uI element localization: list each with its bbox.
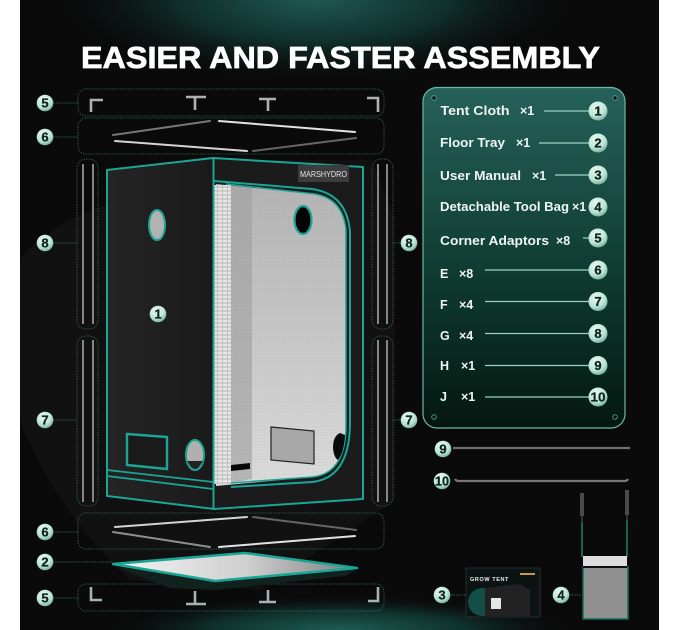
part 5 corner adaptors bottom (91, 587, 378, 604)
list labels: F (440, 298, 448, 312)
list labels: ×8 (556, 234, 570, 248)
mesh grid texture (216, 184, 346, 486)
list labels: Corner Adaptors (440, 234, 549, 248)
list number badges: 9 (594, 358, 602, 373)
zipper strip (214, 185, 231, 484)
list labels: ×1 (532, 169, 546, 183)
list labels: ×1 (572, 200, 586, 214)
callout badges: 4 (557, 588, 565, 602)
list labels: G (440, 329, 450, 343)
list number badges: 8 (594, 326, 602, 341)
callout badges: 7 (405, 412, 413, 428)
part 6 poles top (113, 121, 356, 151)
window: side (127, 434, 167, 469)
list number badges: 3 (594, 168, 602, 182)
callout badges: 8 (41, 236, 49, 250)
floor tray (113, 553, 357, 590)
list labels: Floor Tray (440, 136, 505, 150)
list labels: J (440, 390, 447, 404)
list number badges: 5 (594, 230, 602, 246)
part 9 strap (453, 447, 630, 449)
list number badges: 10 (590, 390, 606, 404)
logo plate: MARSHYDRO (300, 169, 347, 179)
part 8 poles (82, 164, 388, 324)
list number badges: 4 (594, 200, 602, 214)
detachable tool bag (580, 490, 629, 619)
list labels (440, 104, 586, 404)
callout badges: 10 (435, 474, 449, 488)
tent mesh interior (216, 184, 346, 486)
window: back wall (271, 427, 314, 464)
list number badges: 1 (594, 104, 602, 118)
callout badges: 5 (41, 96, 49, 110)
part 6 poles bottom (113, 517, 356, 547)
list labels: ×1 (516, 136, 530, 150)
title: EASIER AND FASTER ASSEMBLY (81, 40, 600, 75)
vent: lower left (186, 440, 204, 470)
list labels: ×8 (459, 267, 473, 281)
logo plate (298, 165, 349, 182)
list number badges: 6 (594, 262, 602, 278)
list labels: ×4 (459, 298, 473, 312)
callout badges: 6 (41, 524, 49, 540)
user manual (466, 568, 540, 617)
list number badges (588, 102, 608, 406)
floor slit (231, 463, 250, 471)
list number badges: 2 (594, 136, 602, 150)
connectors (53, 103, 582, 598)
list labels: Detachable Tool Bag (440, 200, 569, 214)
vent: lower right dark (333, 433, 345, 460)
panel: parts list (423, 88, 625, 428)
panel corner holes (432, 96, 617, 419)
part 10 strap (455, 479, 628, 481)
list labels: ×1 (461, 359, 475, 373)
list labels: Tent Cloth (440, 104, 510, 118)
vent: upper left (149, 210, 165, 240)
callout badges: 9 (439, 442, 447, 456)
tent left face (107, 158, 214, 509)
tent (107, 158, 363, 509)
part 5 corner adaptors top (91, 97, 378, 112)
callout badges: 1 (154, 306, 162, 322)
callout badges: 7 (41, 412, 49, 428)
list labels: ×4 (459, 329, 473, 343)
callout badges: 3 (438, 588, 446, 602)
list number badges: 7 (594, 294, 602, 309)
callout badges: 6 (41, 130, 49, 144)
part 7 poles (82, 340, 388, 502)
inner side wall shade (231, 186, 252, 483)
list labels: ×1 (461, 390, 475, 404)
dashed group boxes (77, 89, 393, 611)
list labels: E (440, 267, 448, 281)
tent outlines (107, 158, 363, 509)
callout badges: 5 (41, 590, 49, 606)
tent right face (214, 158, 363, 509)
callout badges (37, 95, 569, 606)
callout badges: 2 (41, 554, 49, 570)
list leader lines (485, 111, 590, 397)
vent: upper right (294, 206, 312, 234)
callout badges: 8 (405, 236, 413, 250)
list labels: H (440, 359, 449, 373)
user manual: GROW TENT (470, 577, 509, 583)
list labels: User Manual (440, 169, 521, 183)
list labels: ×1 (520, 104, 534, 118)
